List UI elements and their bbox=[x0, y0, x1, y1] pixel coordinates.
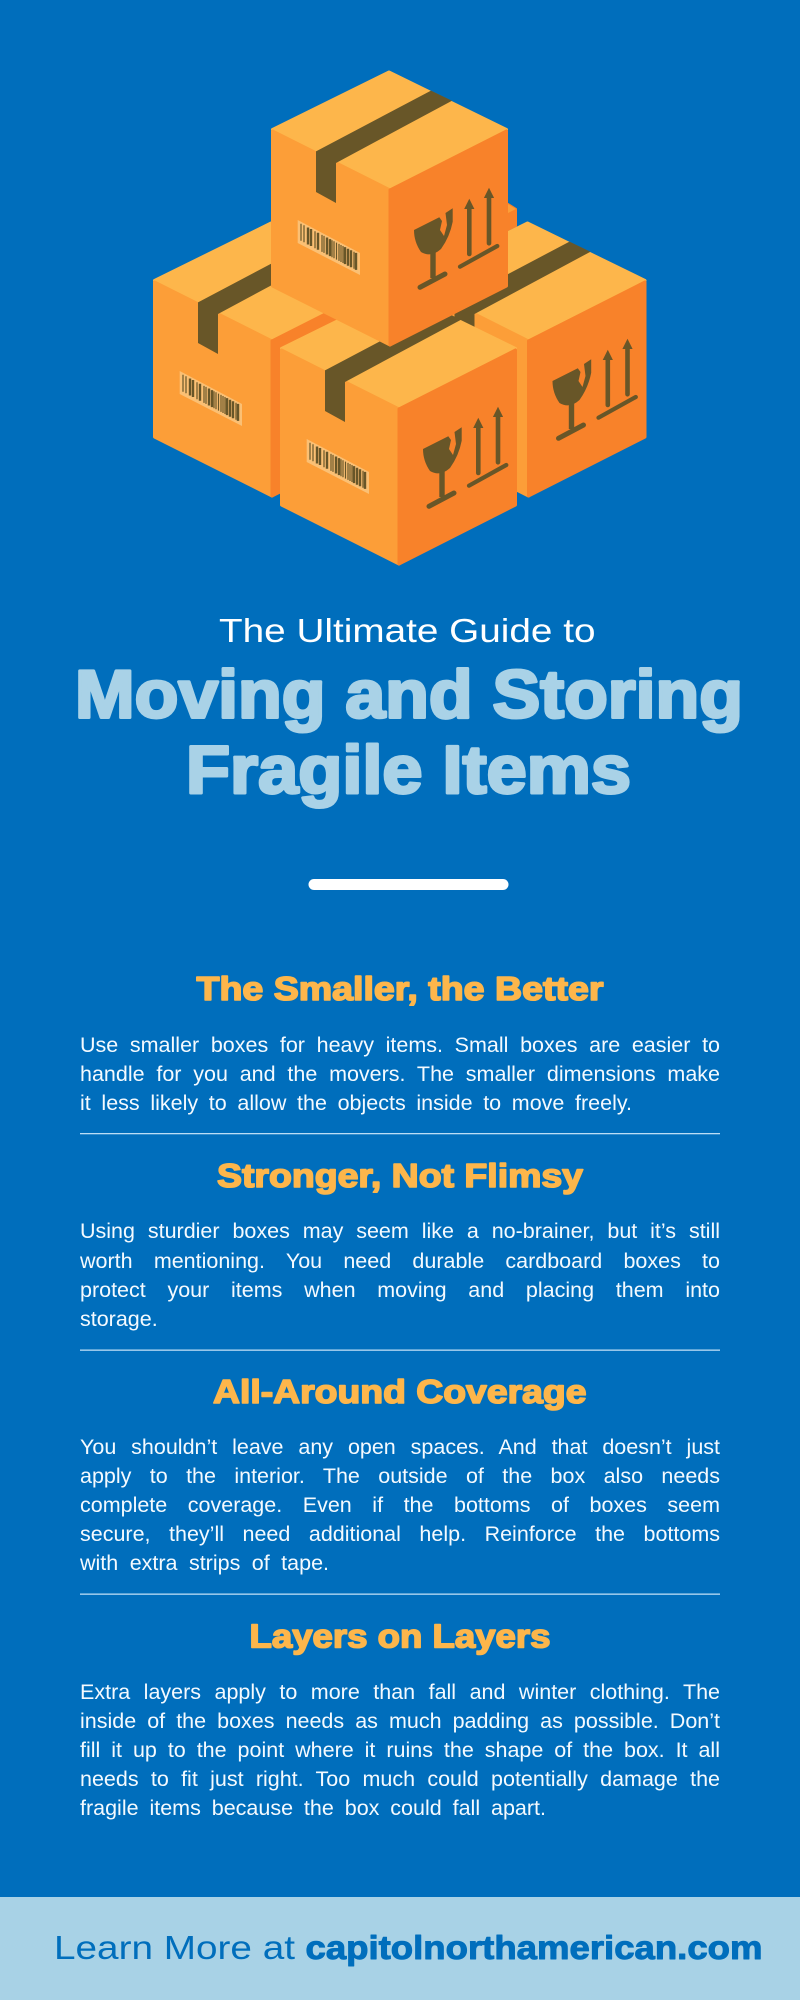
box: front bbox=[282, 291, 516, 564]
body text: All-Around Coverage: apply to the interior. The outside of the box also needs bbox=[80, 1464, 720, 1488]
body text: Layers on Layers: Extra layers apply to more than fall and winter clothing. The bbox=[80, 1680, 720, 1704]
body text: All-Around Coverage: with extra strips of tape. bbox=[80, 1551, 329, 1575]
body text: Layers on Layers: fragile items because the box could fall apart. bbox=[80, 1796, 546, 1820]
title divider bar bbox=[308, 879, 508, 890]
heading: Layers on Layers: Layers on Layers bbox=[250, 1618, 550, 1654]
body text: Stronger, Not Flimsy: Using sturdier boxes may seem like a no-brainer, but it’s still bbox=[80, 1219, 720, 1243]
body text: The Smaller, the Better: it less likely to allow the objects inside to move freely. bbox=[80, 1091, 632, 1115]
title line 1: Moving and Storing bbox=[75, 656, 743, 732]
body text: All-Around Coverage: complete coverage. Even if the bottoms of boxes seem bbox=[80, 1493, 720, 1517]
body text: Stronger, Not Flimsy: worth mentioning. You need durable cardboard boxes to bbox=[80, 1248, 720, 1272]
body text: The Smaller, the Better: handle for you and the movers. The smaller dimensions make bbox=[80, 1062, 720, 1086]
footer website: capitolnorthamerican.com bbox=[306, 1929, 762, 1966]
footer band bbox=[0, 1897, 800, 2000]
main title bbox=[75, 656, 743, 808]
title kicker: The Ultimate Guide to bbox=[219, 612, 596, 649]
box: top bbox=[272, 72, 506, 345]
body text: Layers on Layers bbox=[80, 1680, 720, 1820]
body text: The Smaller, the Better: Use smaller boxes for heavy items. Small boxes are easier to bbox=[80, 1033, 720, 1057]
heading: The Smaller, the Better: The Smaller, the Better bbox=[196, 970, 604, 1007]
box: left bbox=[154, 223, 388, 496]
body text: Stronger, Not Flimsy: protect your items when moving and placing them into bbox=[80, 1278, 720, 1302]
body text: Layers on Layers: fill it up to the point where it ruins the shape of the box. It all bbox=[80, 1738, 720, 1762]
body text: All-Around Coverage bbox=[80, 1435, 720, 1575]
heading: Stronger, Not Flimsy: Stronger, Not Flimsy bbox=[217, 1157, 584, 1194]
body text: Stronger, Not Flimsy: storage. bbox=[80, 1307, 158, 1331]
body text: Stronger, Not Flimsy bbox=[80, 1219, 720, 1331]
footer call to action bbox=[54, 1929, 762, 1966]
body text: Layers on Layers: needs to fit just right. Too much could potentially damage the bbox=[80, 1767, 720, 1791]
body text: All-Around Coverage: You shouldn’t leave any open spaces. And that doesn’t just bbox=[80, 1435, 720, 1459]
body text: The Smaller, the Better bbox=[80, 1033, 720, 1115]
body text: Layers on Layers: inside of the boxes needs as much padding as possible. Don’t bbox=[80, 1709, 720, 1733]
illustration: stack of cardboard boxes bbox=[154, 72, 645, 564]
box: right bbox=[411, 223, 645, 496]
box: back box corner bbox=[500, 200, 516, 234]
title line 2: Fragile Items bbox=[186, 732, 631, 808]
body text: All-Around Coverage: secure, they’ll need additional help. Reinforce the bottoms bbox=[80, 1522, 720, 1546]
heading: All-Around Coverage: All-Around Coverage bbox=[213, 1373, 586, 1410]
footer label: Learn More at bbox=[54, 1929, 295, 1966]
